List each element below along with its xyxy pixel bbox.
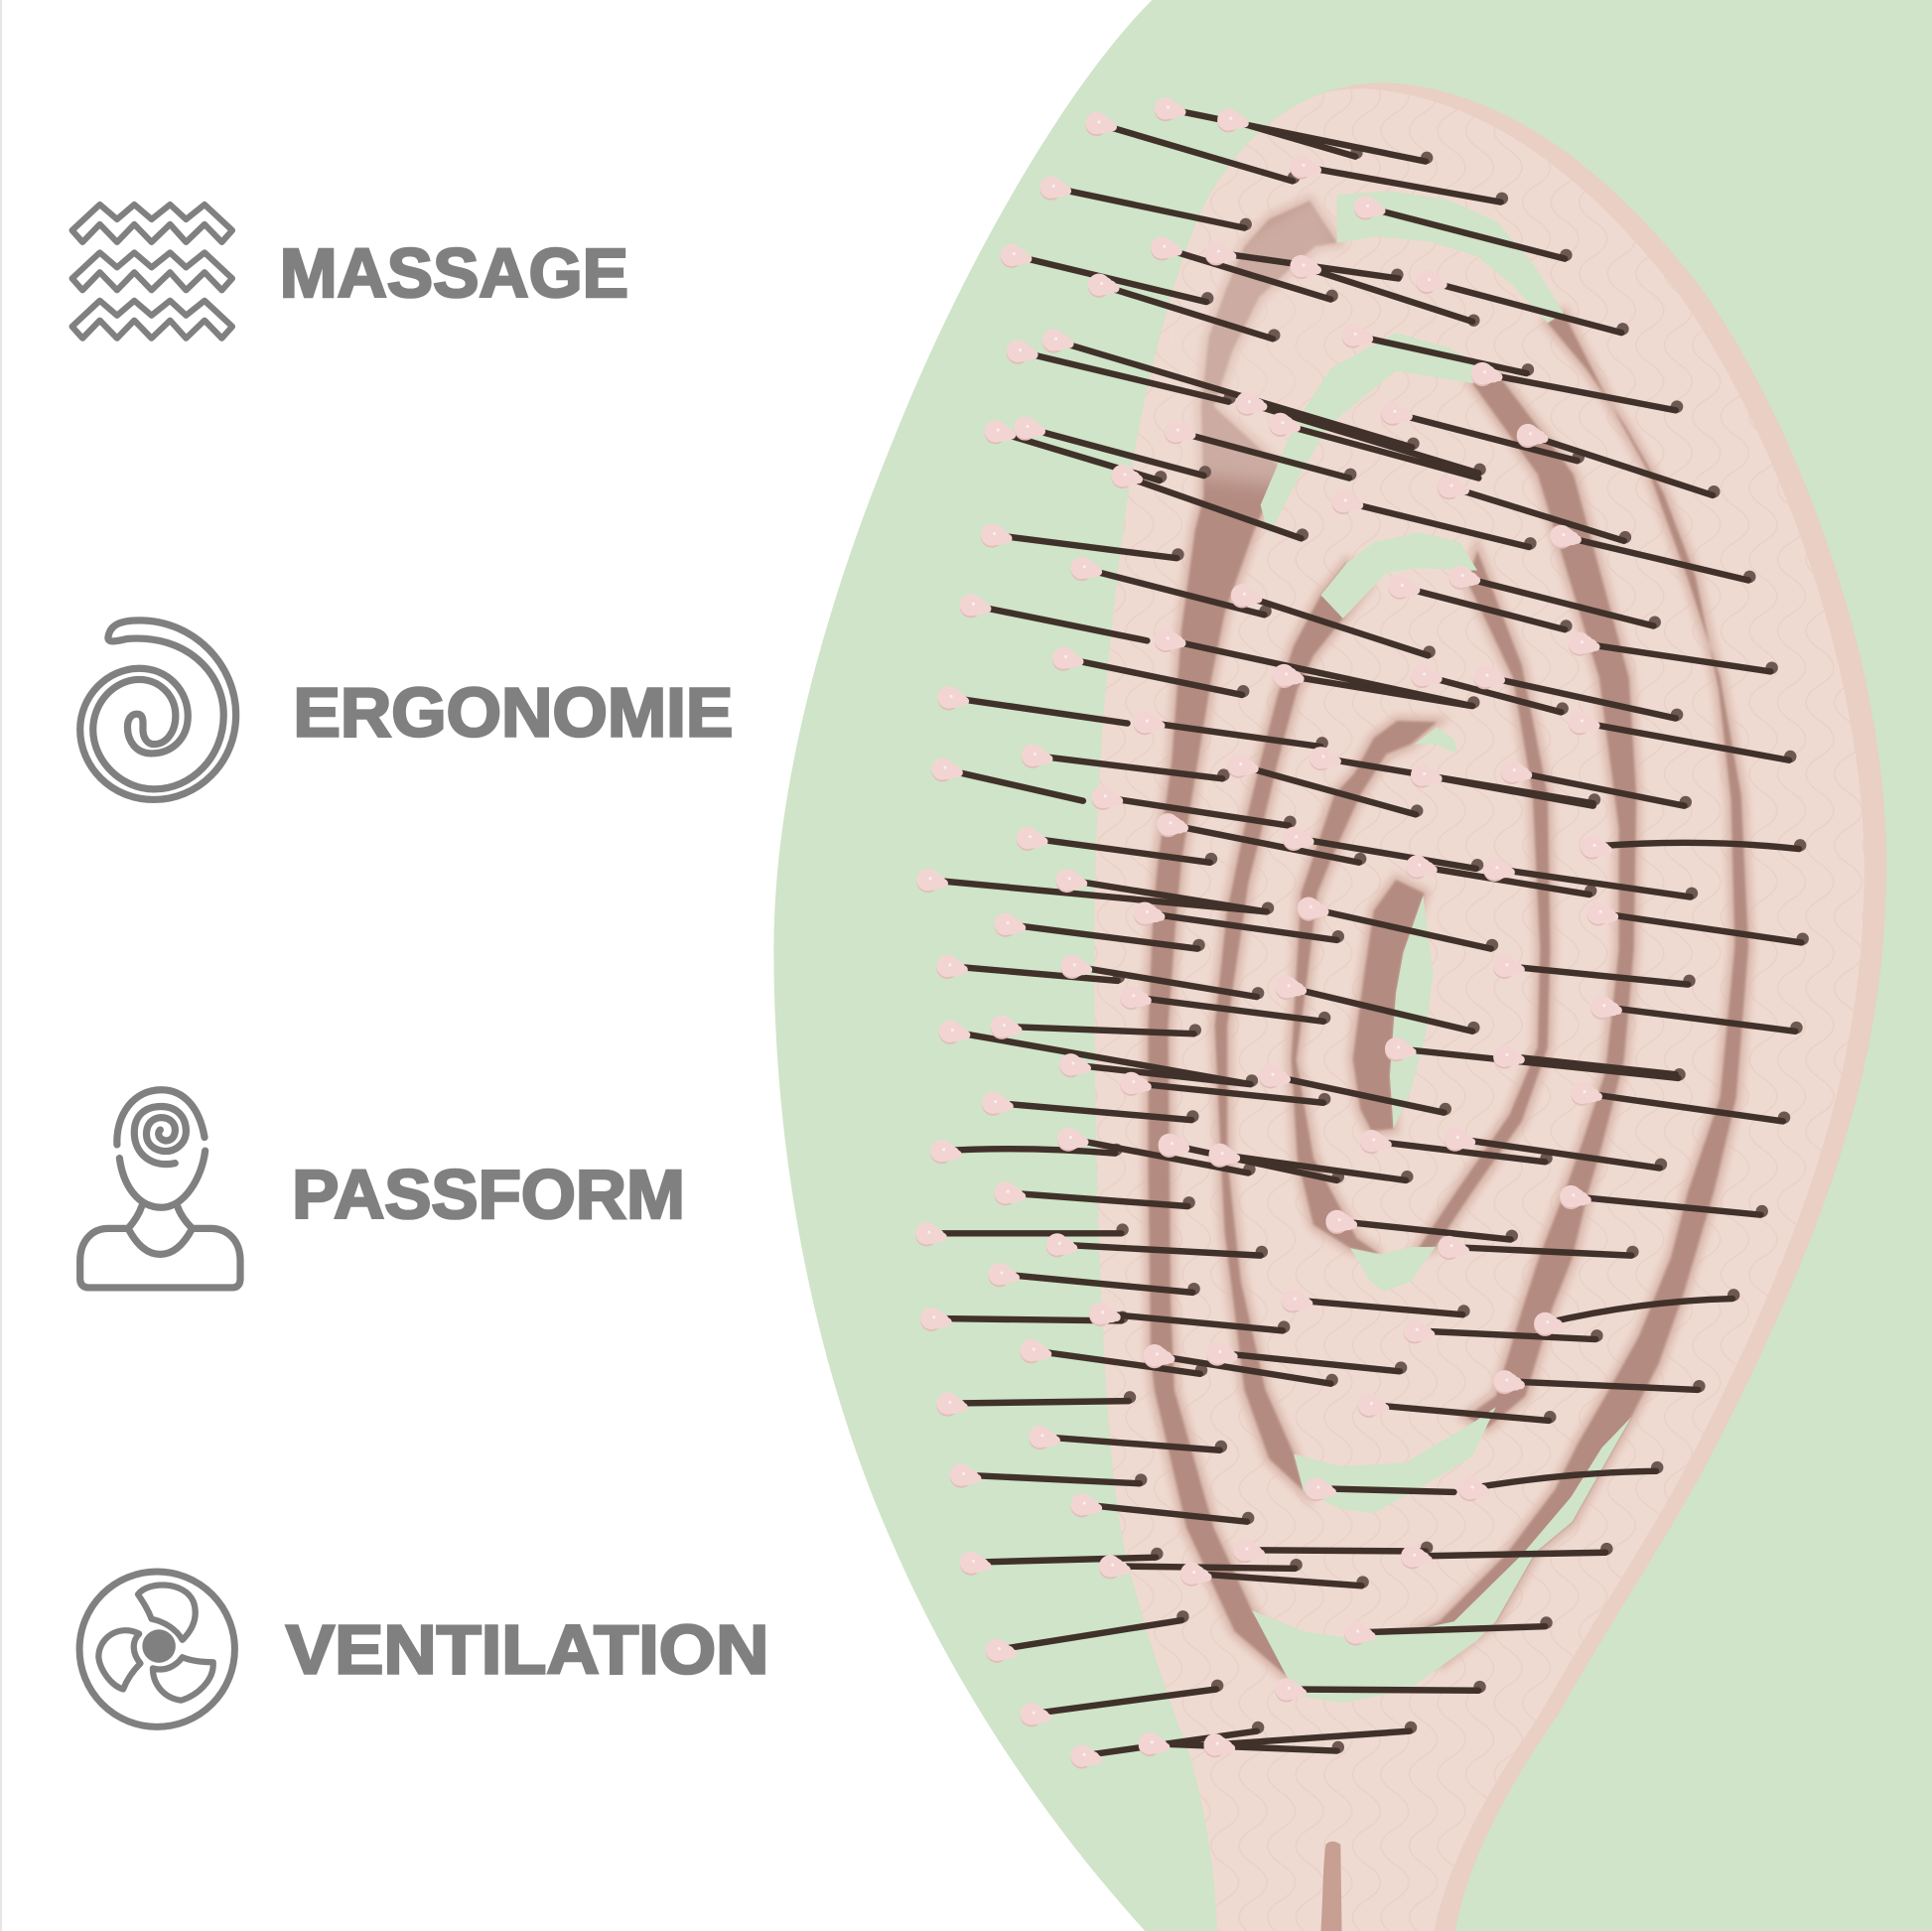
feature: passform: [80, 1090, 685, 1288]
lighter fade on upper left arc: [1182, 185, 1343, 486]
green openings: [1252, 191, 1631, 1703]
icon: fan: [79, 1572, 234, 1726]
left page edge: [0, 0, 2, 1931]
handle slot: [1320, 1842, 1342, 1931]
opening: second bottom: [1294, 1407, 1496, 1513]
brush rim: [1094, 82, 1886, 1931]
hairbrush: [926, 82, 1886, 1931]
icon: spiral: [80, 621, 236, 799]
opening: outer bottom: [1252, 1417, 1631, 1703]
opening: outer top: [1337, 191, 1564, 323]
feature: massage: [72, 205, 628, 339]
label: ergonomie: ERGONOMIE: [293, 674, 733, 752]
bristle tips: [926, 107, 1618, 1759]
feature: ergonomie: [80, 621, 733, 799]
label: passform: PASSFORM: [292, 1156, 685, 1233]
green background shape: [773, 0, 1932, 1931]
icon: person with spiral head: [80, 1090, 240, 1288]
opening: third top: [1320, 532, 1477, 619]
bristle sockets: [1116, 153, 1803, 1747]
opening: centre oval: [1390, 896, 1433, 1129]
opening: third bottom: [1350, 1247, 1436, 1292]
label: ventilation: VENTILATION: [286, 1610, 768, 1688]
label: massage: MASSAGE: [280, 234, 628, 312]
bristle shafts: [926, 108, 1801, 1756]
spiral shadow walls: [1149, 201, 1748, 1676]
opening: centre top: [1415, 727, 1457, 755]
opening: second top: [1261, 333, 1497, 536]
feature: ventilation: [79, 1572, 768, 1726]
brush face: [1037, 88, 1864, 1931]
icon: zigzag waves: [72, 205, 232, 339]
